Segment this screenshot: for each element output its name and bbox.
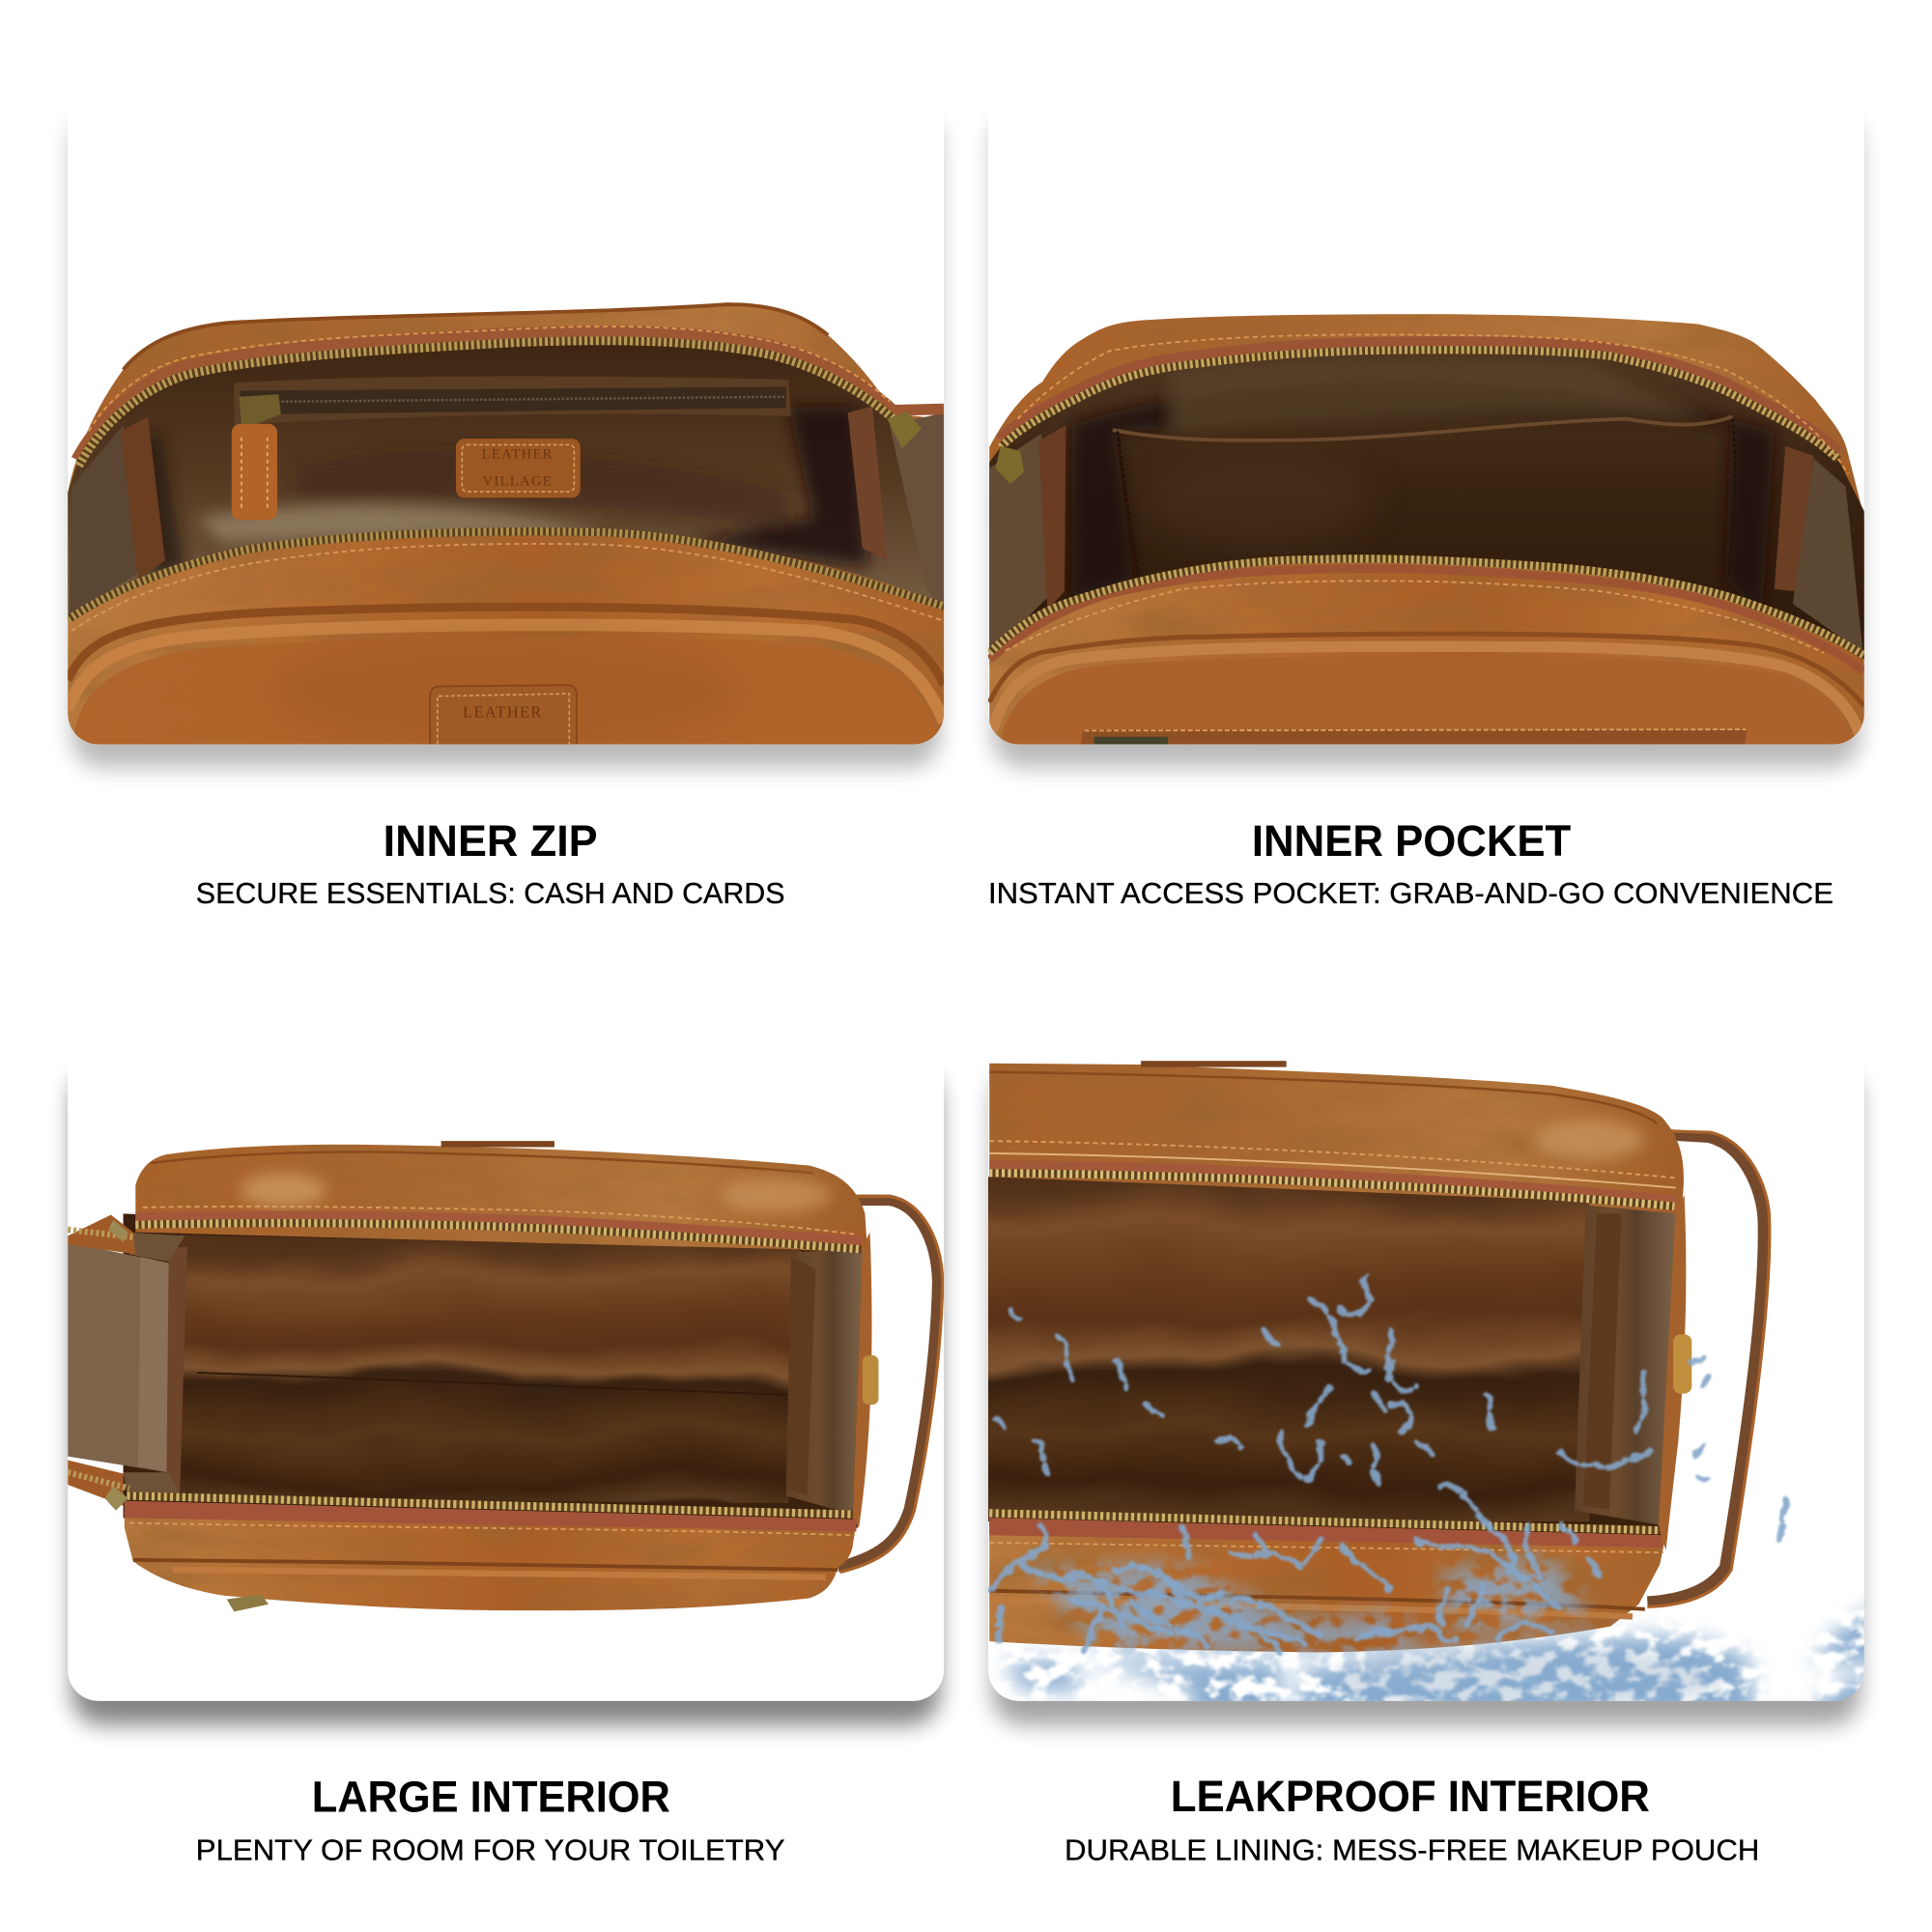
heading: INNER ZIP bbox=[384, 816, 598, 866]
subheading: DURABLE LINING: MESS-FREE MAKEUP POUCH bbox=[1065, 1833, 1759, 1866]
card bbox=[988, 1041, 1864, 1701]
zipper slider left bbox=[104, 1220, 128, 1511]
side lining right bbox=[786, 1249, 863, 1515]
card bbox=[68, 1041, 944, 1701]
pouch photo: full interior from above bbox=[68, 1141, 943, 1611]
card shadow bbox=[71, 113, 940, 768]
zipper slider bottom bbox=[227, 1595, 269, 1611]
pouch photo: interior with water splash bbox=[949, 1061, 1886, 1725]
card shadow bbox=[71, 1069, 940, 1725]
panel: inner zip bbox=[68, 85, 944, 910]
side lining bbox=[1575, 1205, 1677, 1525]
snap stud bbox=[1673, 1334, 1691, 1394]
interior backing bbox=[989, 1171, 1667, 1540]
slider right bbox=[887, 412, 922, 448]
water pool at bottom bbox=[1331, 1646, 1725, 1710]
card shadow bbox=[992, 113, 1861, 768]
heading: LEAKPROOF INTERIOR bbox=[1171, 1772, 1650, 1821]
pouch photo: open with inner zip bbox=[68, 304, 944, 752]
front patch bbox=[430, 685, 577, 752]
front pocket edge bbox=[1081, 729, 1747, 744]
leather label: VILLAGE bbox=[483, 474, 553, 490]
panel: large interior bbox=[68, 1041, 944, 1866]
card bbox=[988, 85, 1864, 744]
flap lining left bbox=[68, 1242, 167, 1472]
subheading: INSTANT ACCESS POCKET: GRAB-AND-GO CONVENIENCE bbox=[988, 877, 1833, 910]
card bbox=[68, 85, 944, 744]
interior backing bbox=[124, 1213, 867, 1528]
handle bbox=[1647, 1135, 1763, 1602]
water texture over front leather bbox=[1029, 1559, 1589, 1651]
panel: inner pocket bbox=[988, 85, 1864, 910]
front patch: LEATHER bbox=[463, 702, 543, 721]
subheading: SECURE ESSENTIALS: CASH AND CARDS bbox=[196, 877, 784, 910]
satin lining bbox=[180, 1235, 801, 1503]
slider left bbox=[996, 446, 1024, 484]
heading: INNER POCKET bbox=[1252, 816, 1572, 866]
heading: LARGE INTERIOR bbox=[312, 1773, 670, 1822]
water splash droplets bbox=[989, 1279, 1786, 1651]
panel: leakproof interior bbox=[949, 1041, 1886, 1866]
pouch photo: open with inner pocket bbox=[989, 314, 1864, 752]
subheading: PLENTY OF ROOM FOR YOUR TOILETRY bbox=[196, 1833, 784, 1866]
handle bbox=[838, 1200, 938, 1567]
card shadow bbox=[992, 1069, 1861, 1725]
snap stud bbox=[863, 1355, 878, 1405]
satin lining bbox=[949, 1164, 1638, 1534]
leather label: LEATHER bbox=[482, 446, 554, 462]
leather label bbox=[456, 439, 581, 497]
zipper pull and tab bbox=[232, 394, 281, 520]
